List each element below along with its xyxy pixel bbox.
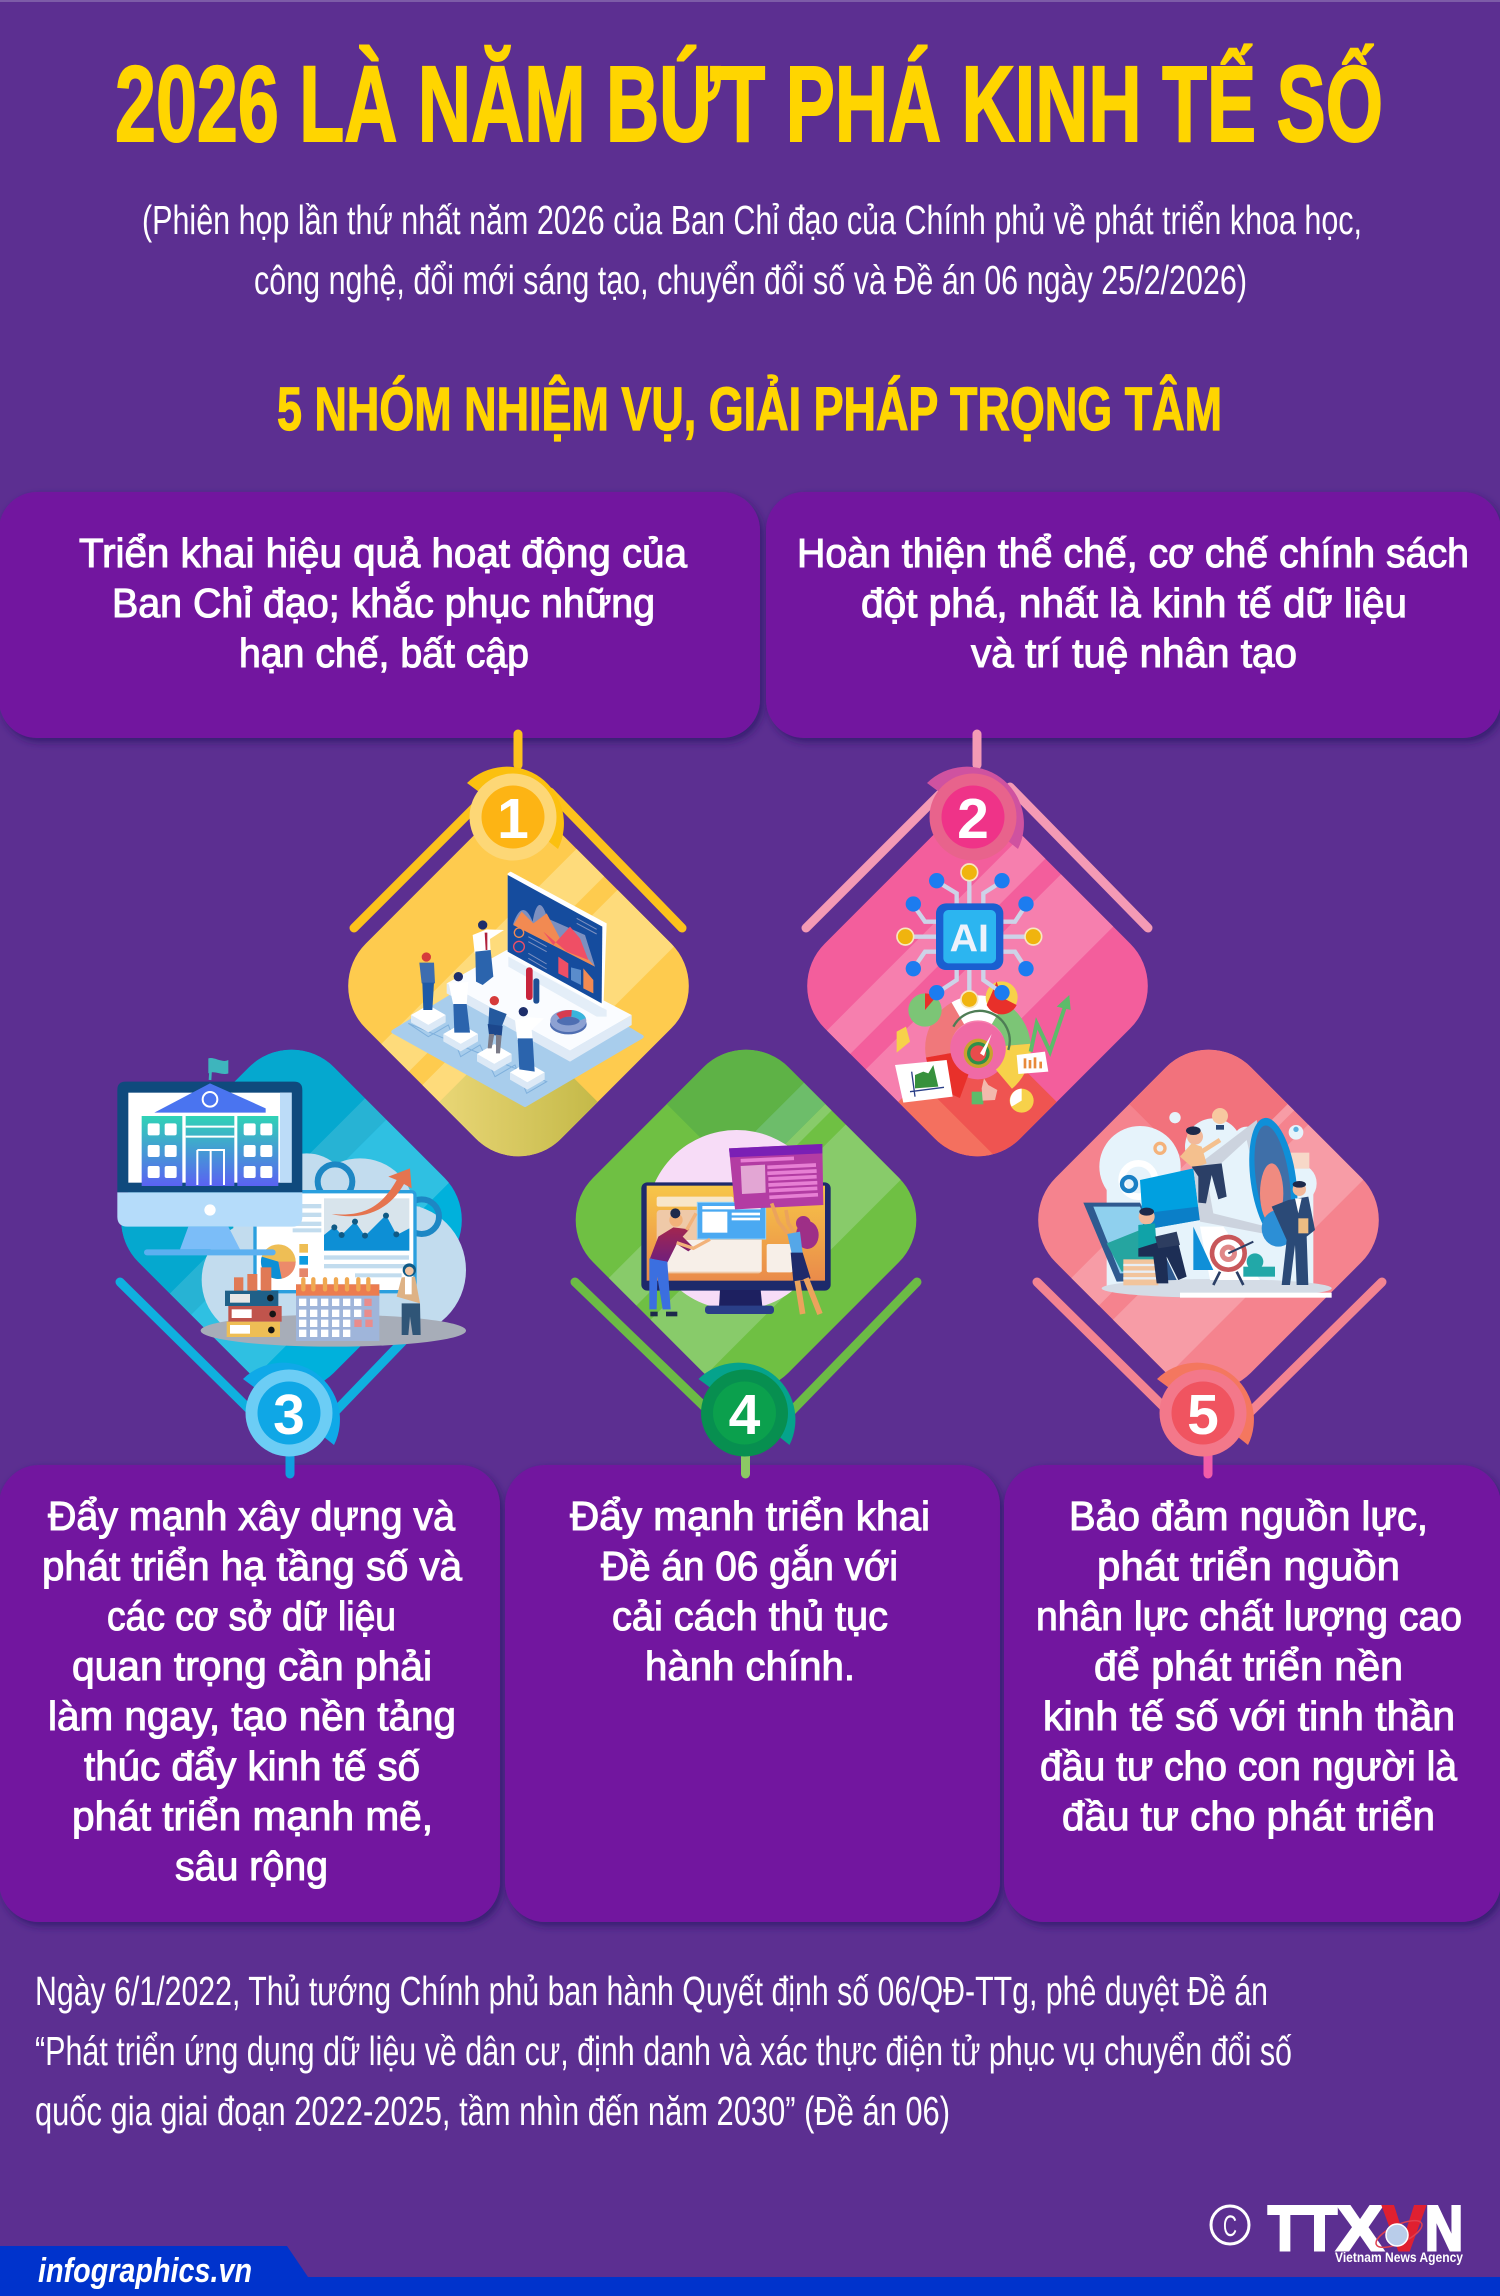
TTXVN logo: [1268, 2194, 1463, 2265]
outer arc: [467, 767, 564, 849]
panel: task 3: làm ngay, tạo nền tảng: [48, 1693, 456, 1739]
note on Decision 06: [35, 1968, 1292, 2134]
panel: task 2: Hoàn thiện thể chế, cơ chế chính sách: [797, 530, 1469, 576]
panel: task 3: phát triển hạ tầng số và: [42, 1543, 462, 1589]
note on Decision 06: quốc gia giai đoạn 2022-2025, tầm nhìn đến năm 2030” (Đề án 06): [35, 2088, 950, 2134]
badge 3: 3: [273, 1383, 305, 1447]
footer band: [0, 2246, 1500, 2296]
TTXVN logo: T: [1268, 2194, 1302, 2264]
connector lines 4: [575, 1282, 917, 1423]
panel: task 1: [0, 492, 760, 738]
panel: task 5: đầu tư cho phát triển: [1062, 1793, 1435, 1839]
panel: task 5: phát triển nguồn: [1097, 1543, 1400, 1589]
badge 4: [698, 1363, 795, 1474]
panel: task 4: Đề án 06 gắn với: [601, 1543, 898, 1589]
panel: task 5: nhân lực chất lượng cao: [1036, 1593, 1462, 1639]
panel: task 5: Bảo đảm nguồn lực,: [1069, 1493, 1428, 1539]
panel: task 1: hạn chế, bất cập: [239, 630, 529, 676]
badge 2: [927, 767, 1024, 860]
badge 5: [1157, 1363, 1254, 1474]
panel: task 3: sâu rộng: [175, 1843, 328, 1889]
stub: [1204, 1452, 1212, 1474]
illustration 2: AI chip and charts: [895, 864, 1071, 1113]
TTXVN logo: Vietnam News Agency: [1335, 2249, 1463, 2265]
panel: task 3: các cơ sở dữ liệu: [107, 1593, 396, 1639]
badge 1: [467, 767, 564, 860]
panel: task 2: và trí tuệ nhân tạo: [971, 630, 1297, 676]
panel: task 5: kinh tế số với tinh thần: [1043, 1693, 1455, 1739]
panel: task 3: phát triển mạnh mẽ,: [72, 1793, 433, 1839]
outer arc: [927, 767, 1024, 849]
panel: task 4: cải cách thủ tục: [612, 1593, 888, 1639]
panel: task 2: [766, 492, 1500, 738]
badge 1: 1: [497, 787, 529, 851]
panel: task 2: đột phá, nhất là kinh tế dữ liệu: [861, 580, 1407, 626]
copyright symbol: C: [1223, 2210, 1237, 2243]
panel: task 3: Đẩy mạnh xây dựng và: [48, 1493, 455, 1539]
connector lines 2: [806, 734, 1148, 928]
panel: task 3: [0, 1465, 500, 1922]
TTXVN logo: N: [1425, 2194, 1463, 2264]
diamond 3 background: [121, 1050, 462, 1380]
badge 4: 4: [729, 1383, 761, 1447]
diamond 1 background: [348, 835, 689, 1156]
panel: task 3: thúc đẩy kinh tế số: [84, 1743, 420, 1789]
illustration 1: data dashboard team: [393, 872, 642, 1105]
panel: task 4: Đẩy mạnh triển khai: [570, 1493, 930, 1539]
connector lines 3: [120, 1282, 460, 1417]
copyright symbol: [1211, 2206, 1249, 2244]
illustration 4: building web interface: [641, 1130, 831, 1316]
panel: task 4: hành chính.: [645, 1643, 855, 1689]
badge 2: 2: [957, 787, 989, 851]
TTXVN logo: V: [1383, 2194, 1425, 2264]
badge 5: 5: [1187, 1383, 1219, 1447]
diamond 5 background: [1038, 1050, 1379, 1382]
diamond 2 background: [807, 835, 1148, 1156]
stub: [286, 1452, 294, 1474]
panel: task 1: Ban Chỉ đạo; khắc phục những: [112, 580, 655, 626]
panel: task 1: Triển khai hiệu quả hoạt động của: [79, 530, 687, 576]
TTXVN logo: T: [1302, 2194, 1337, 2264]
connector lines 5: [1037, 1282, 1382, 1432]
connector lines 1: [354, 734, 682, 928]
panel: task 5: để phát triển nền: [1094, 1643, 1403, 1689]
subtitle: [142, 197, 1362, 303]
TTXVN logo: X: [1337, 2194, 1383, 2264]
panel: task 5: đầu tư cho con người là: [1040, 1743, 1457, 1789]
illustration 5: megaphone marketing team: [1083, 1108, 1332, 1298]
panel: task 5: [1004, 1465, 1500, 1922]
stub: [741, 1452, 750, 1474]
diamond 4 background: [576, 1050, 916, 1380]
illustration 2: AI chip and charts: AI: [950, 917, 989, 961]
panel: task 3: quan trọng cần phải: [72, 1643, 432, 1689]
footer website: infographics.vn: [38, 2252, 252, 2290]
panel: task 4: [505, 1465, 1000, 1922]
badge 3: [243, 1363, 340, 1474]
illustration 3: digital infrastructure: [117, 1058, 466, 1347]
